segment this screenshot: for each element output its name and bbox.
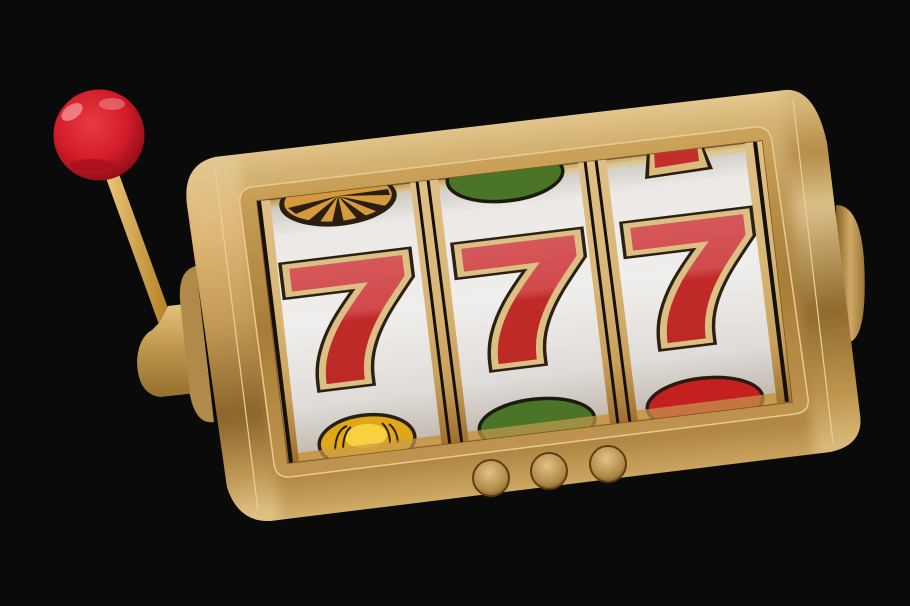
symbol: green oval top	[446, 164, 564, 204]
seven reel three: 7	[619, 179, 769, 380]
machine body	[175, 85, 875, 530]
symbol: orange fan wheel	[279, 185, 397, 227]
reel window contents	[258, 141, 792, 472]
button left	[473, 460, 509, 496]
lever stick	[106, 174, 173, 330]
window frame	[240, 127, 808, 477]
lever base	[137, 300, 206, 397]
right shading	[778, 90, 860, 454]
right seam	[793, 100, 833, 443]
reel divider right	[578, 159, 638, 425]
reel faces	[270, 152, 777, 453]
symbol: yellow oval	[317, 412, 417, 458]
lever	[54, 90, 206, 397]
reel divider left	[410, 179, 469, 447]
lever ball	[54, 90, 144, 180]
buttons	[473, 446, 626, 496]
knob on right side	[836, 205, 865, 342]
left seam	[215, 168, 258, 510]
seven reel two: 7	[450, 200, 600, 401]
seven reel two: 7	[450, 200, 600, 401]
window left strip	[258, 200, 299, 463]
button right	[590, 446, 626, 482]
body side shading	[175, 85, 875, 530]
left shading	[186, 154, 286, 521]
symbol: green oval bottom	[478, 396, 596, 440]
seven reel three: 7	[619, 179, 769, 380]
bottom reflection band	[288, 393, 792, 463]
button middle	[531, 453, 567, 489]
seven reel one: 7	[278, 220, 428, 421]
window opening	[257, 141, 792, 463]
seven reel one: 7	[278, 220, 428, 421]
seven reel three: 7	[619, 179, 769, 380]
hub on left side	[180, 266, 214, 422]
symbol: red oval bottom	[646, 376, 764, 419]
seven reel two: 7	[450, 200, 600, 401]
window right strip	[745, 141, 792, 403]
symbol: red partial seven	[645, 148, 713, 179]
seven reel one: 7	[278, 220, 428, 421]
illustration: golden slot machine on black	[54, 90, 865, 521]
